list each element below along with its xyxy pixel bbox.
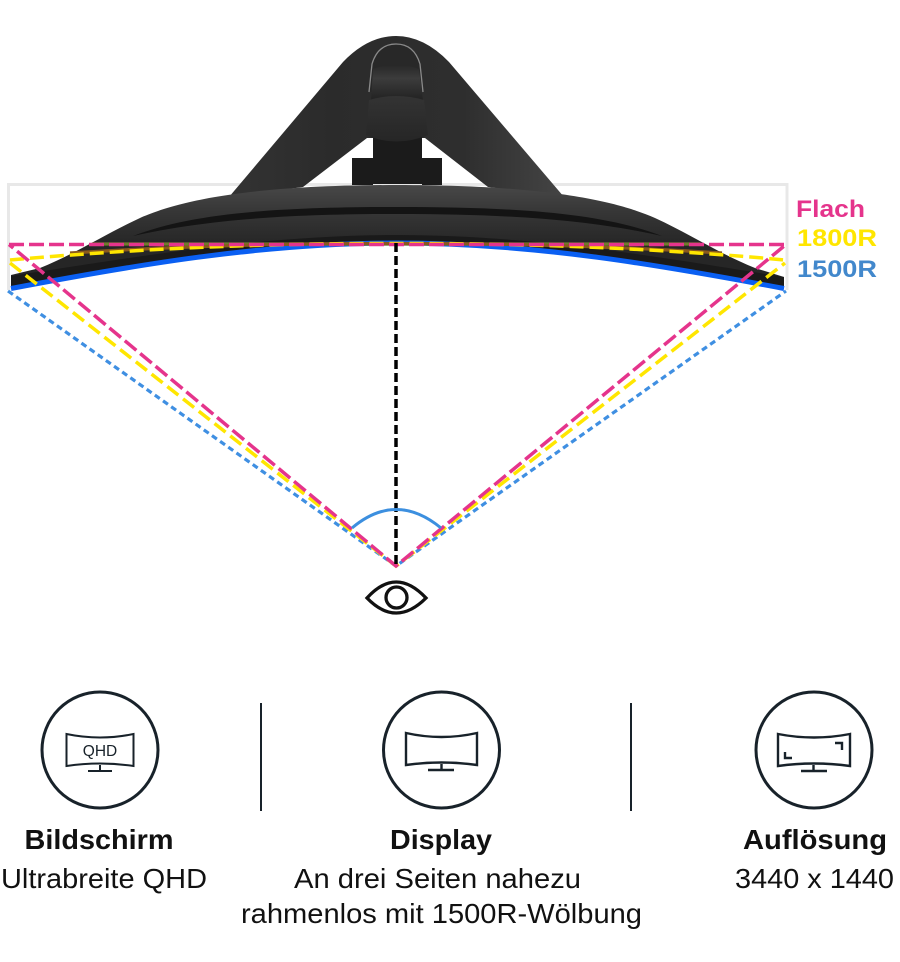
curved monitor body <box>11 185 784 289</box>
legend: Flach: Flach <box>796 196 865 223</box>
viewing angle arc <box>352 510 441 528</box>
column: Display: An drei Seiten nahezu <box>294 863 581 894</box>
stand neck <box>352 136 442 185</box>
monitor stand <box>229 36 564 197</box>
overlap tint of guide lines on monitor <box>70 243 722 253</box>
icon: curved monitor <box>384 692 500 808</box>
hinge upper part <box>371 64 423 100</box>
column: Auflösung: Auflösung <box>743 824 887 855</box>
icon: eye <box>367 582 426 613</box>
column: Bildschirm <box>1 824 207 894</box>
monitor rear shell <box>11 185 784 289</box>
legend <box>796 196 877 283</box>
stand arm <box>229 36 564 197</box>
legend: 1500R: 1500R <box>797 256 877 283</box>
column: Bildschirm: Ultrabreite QHD <box>1 863 207 894</box>
yellow 1800R guide <box>10 243 785 566</box>
blue 1500R sight lines <box>8 291 786 566</box>
icon: QHD monitor: QHD <box>83 743 117 760</box>
centre axis dashed line <box>394 243 398 566</box>
hinge cap <box>366 96 428 142</box>
flat screen outline box <box>8 184 787 290</box>
column: Display <box>241 824 642 929</box>
column: Auflösung <box>735 824 894 894</box>
pink flat guide <box>9 244 786 566</box>
divider <box>630 703 632 811</box>
icon: resolution monitor <box>756 692 872 808</box>
rear vent groove <box>133 207 662 236</box>
1500R blue screen edge <box>11 243 784 288</box>
column: Bildschirm: Bildschirm <box>24 824 174 855</box>
hinge hoop <box>369 44 423 92</box>
column: Display: Display <box>390 824 492 855</box>
column: Display: rahmenlos mit 1500R-Wölbung <box>241 898 642 929</box>
monitor front bezel band <box>11 235 784 289</box>
divider <box>260 703 262 811</box>
column: Auflösung: 3440 x 1440 <box>735 863 894 894</box>
icon: QHD monitor <box>42 692 158 808</box>
legend: 1800R: 1800R <box>797 225 877 252</box>
